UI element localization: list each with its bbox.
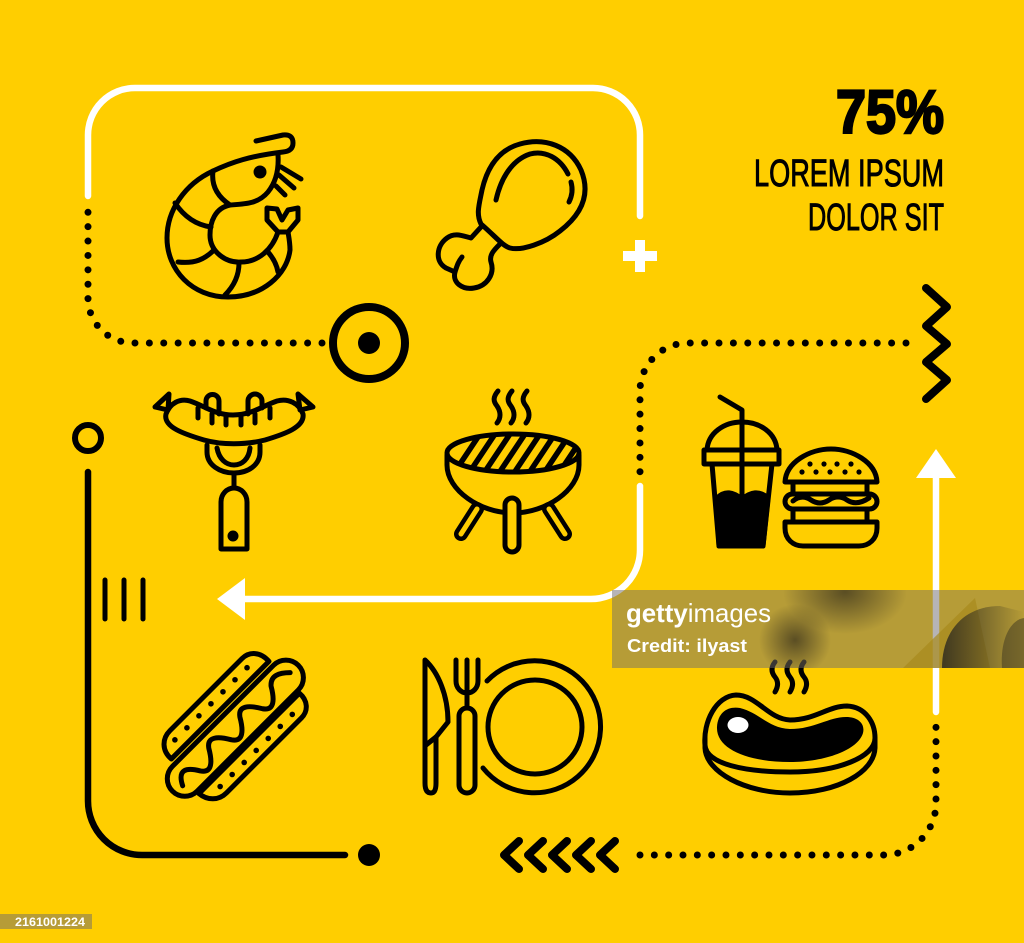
icon: hot dog <box>141 634 326 819</box>
stat: 75%: 75% <box>836 78 944 146</box>
path: white up arrow <box>916 449 956 712</box>
watermark logo text: gettyimages <box>626 598 771 628</box>
icon: plus <box>623 240 657 272</box>
icon: plate with knife and fork <box>425 660 601 793</box>
icon: zigzag <box>926 288 947 399</box>
icon: barbecue grill <box>447 391 585 552</box>
icon: chicken leg <box>438 142 585 288</box>
watermark credit: Credit: ilyast <box>627 636 747 656</box>
bottom bun <box>199 693 313 807</box>
icon: burger <box>785 449 877 546</box>
path: dotted route bottom right <box>640 727 936 855</box>
icon: target circle <box>333 307 405 379</box>
icon: chevrons <box>504 841 615 869</box>
image id strip: 2161001224 <box>15 917 86 929</box>
icon: sausage on fork <box>155 394 313 549</box>
path: white rounded route top <box>88 88 640 216</box>
path: dotted route to zigzag <box>640 343 906 472</box>
watermark banner <box>612 590 1024 668</box>
path: dotted route to target <box>88 212 322 343</box>
top bun <box>156 646 269 759</box>
icon: steak <box>705 662 875 793</box>
path: white return arrow <box>217 486 640 620</box>
mustard squiggle <box>174 667 298 790</box>
path: black left line with end dots <box>75 425 380 866</box>
icon: drink cup <box>704 397 779 546</box>
text: lorem ipsum: LOREM IPSUM <box>754 153 944 195</box>
text: dolor sit: DOLOR SIT <box>808 197 944 239</box>
image id strip <box>0 914 92 929</box>
icon: three bars <box>105 580 143 619</box>
icon: shrimp <box>167 135 301 297</box>
